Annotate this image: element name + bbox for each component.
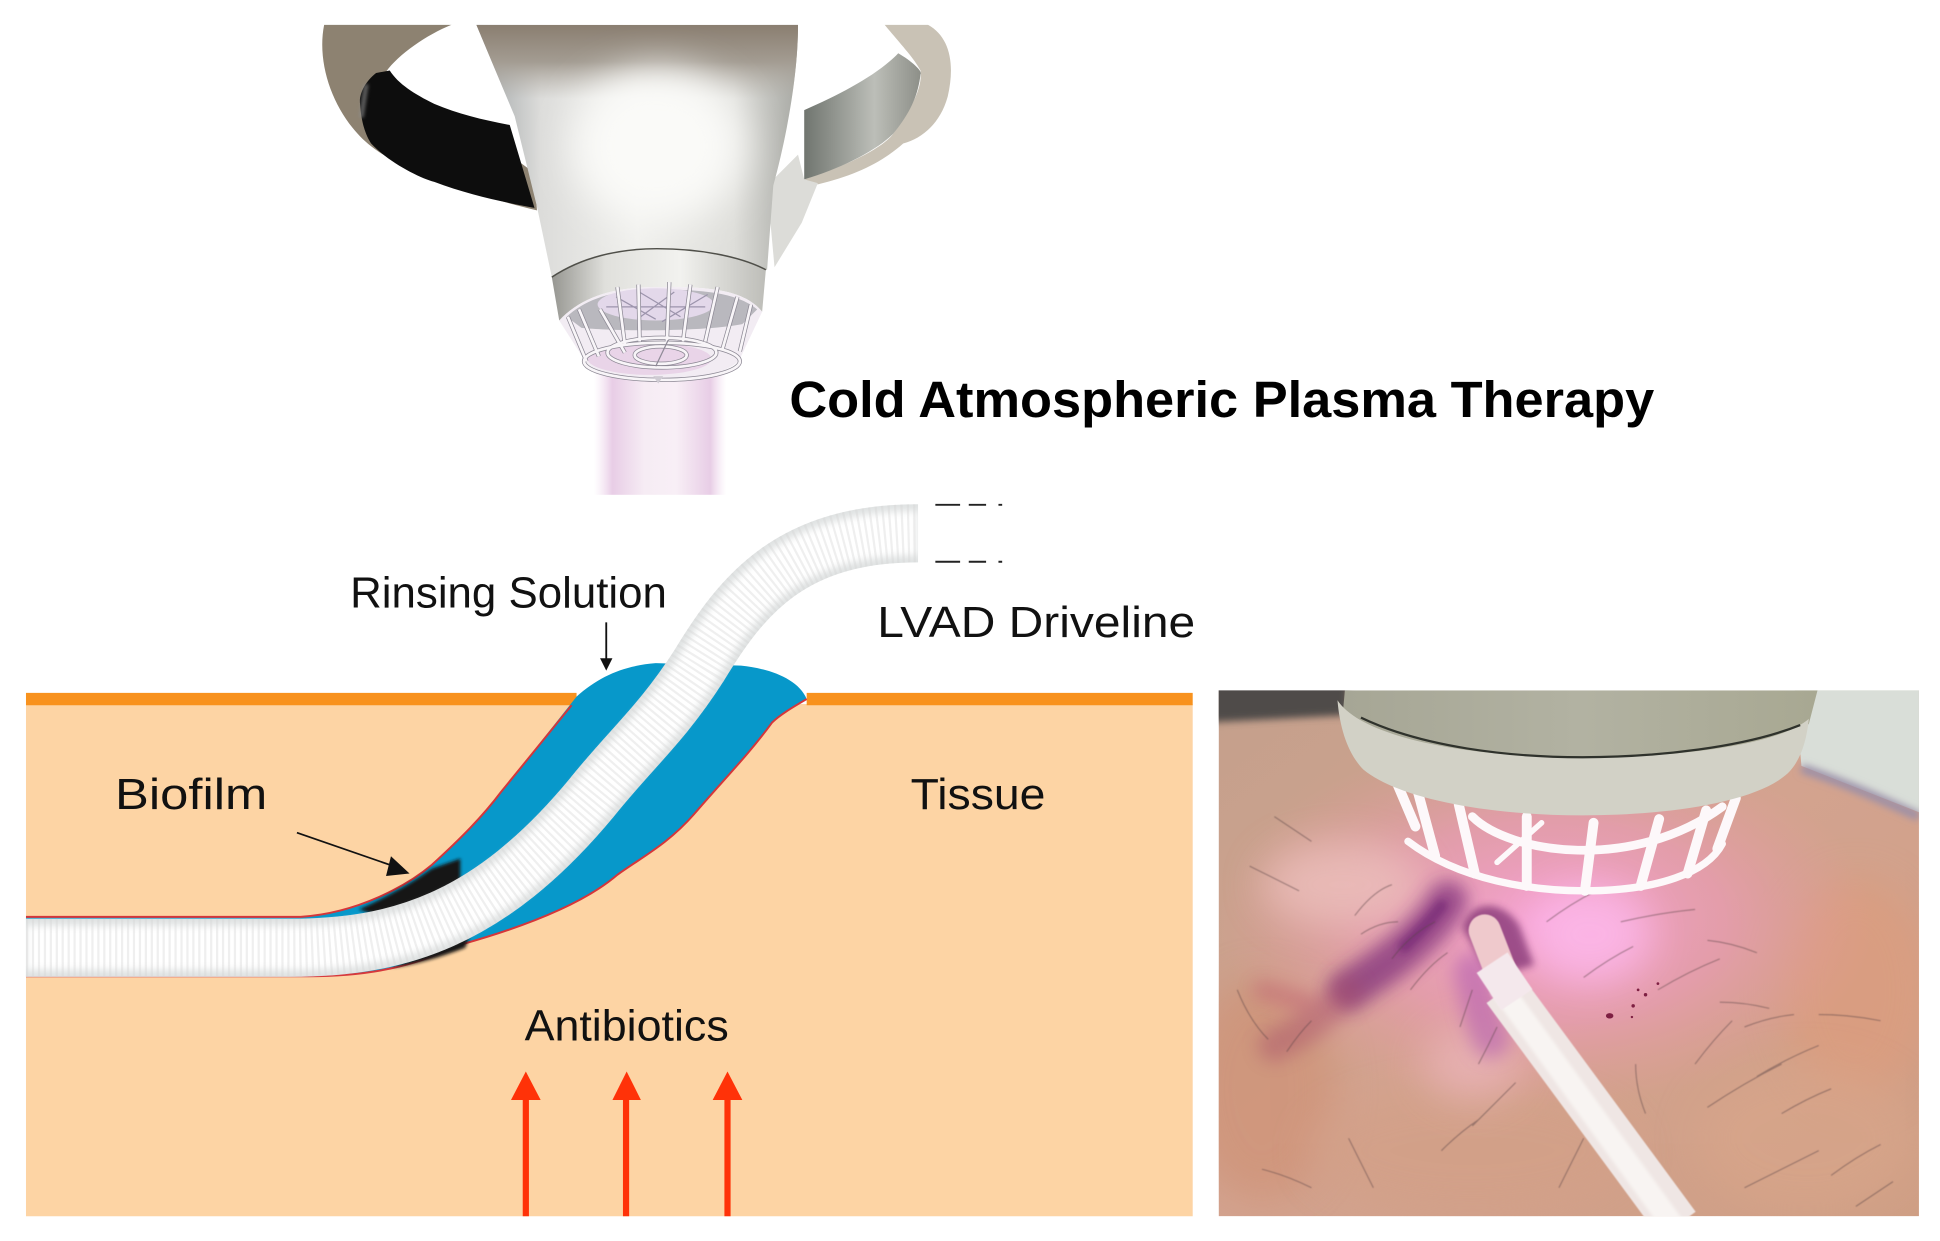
- label: tissue: Tissue: [911, 771, 1045, 819]
- photo: plasma treatment on patient: [1188, 678, 1930, 1225]
- label: antibiotics: Antibiotics: [525, 1003, 729, 1051]
- skin: [1219, 690, 1919, 1216]
- right ring: [767, 25, 951, 267]
- photo cage: [1394, 777, 1736, 891]
- plasma cage: [559, 282, 762, 384]
- skin tones: [1218, 978, 1338, 1200]
- driveline exit site: [1462, 906, 1534, 977]
- blood spots: [1606, 982, 1659, 1019]
- skin line: [26, 693, 1193, 705]
- background corners: [1218, 690, 1352, 728]
- pink glow: [1288, 794, 1823, 1068]
- left ring: [322, 25, 537, 210]
- panel: driveline diagram: [26, 505, 1195, 1216]
- arrow: biofilm: [297, 833, 410, 876]
- title: Cold Atmospheric Plasma Therapy: [789, 371, 1654, 428]
- plasma beam: [594, 371, 726, 495]
- label: biofilm: Biofilm: [115, 771, 267, 819]
- tissue: [26, 704, 1193, 1216]
- device collar: [552, 249, 766, 320]
- label: LVAD driveline: LVAD Driveline: [877, 599, 1195, 647]
- device body: [470, 25, 804, 277]
- dashed continuation: [935, 505, 1002, 562]
- rinsing solution pocket: [26, 663, 807, 976]
- driveline tube: [26, 533, 918, 948]
- photo device head: [1337, 690, 1818, 815]
- arrow: rinsing solution: [600, 622, 612, 671]
- label: rinsing solution: Rinsing Solution: [350, 570, 667, 618]
- photo driveline: [1485, 930, 1678, 1225]
- biofilm: [359, 859, 473, 968]
- bruise: [1262, 901, 1491, 1046]
- device illustration: [322, 25, 951, 495]
- hairs: [1237, 817, 1893, 1206]
- arrows: antibiotics: [511, 1071, 742, 1216]
